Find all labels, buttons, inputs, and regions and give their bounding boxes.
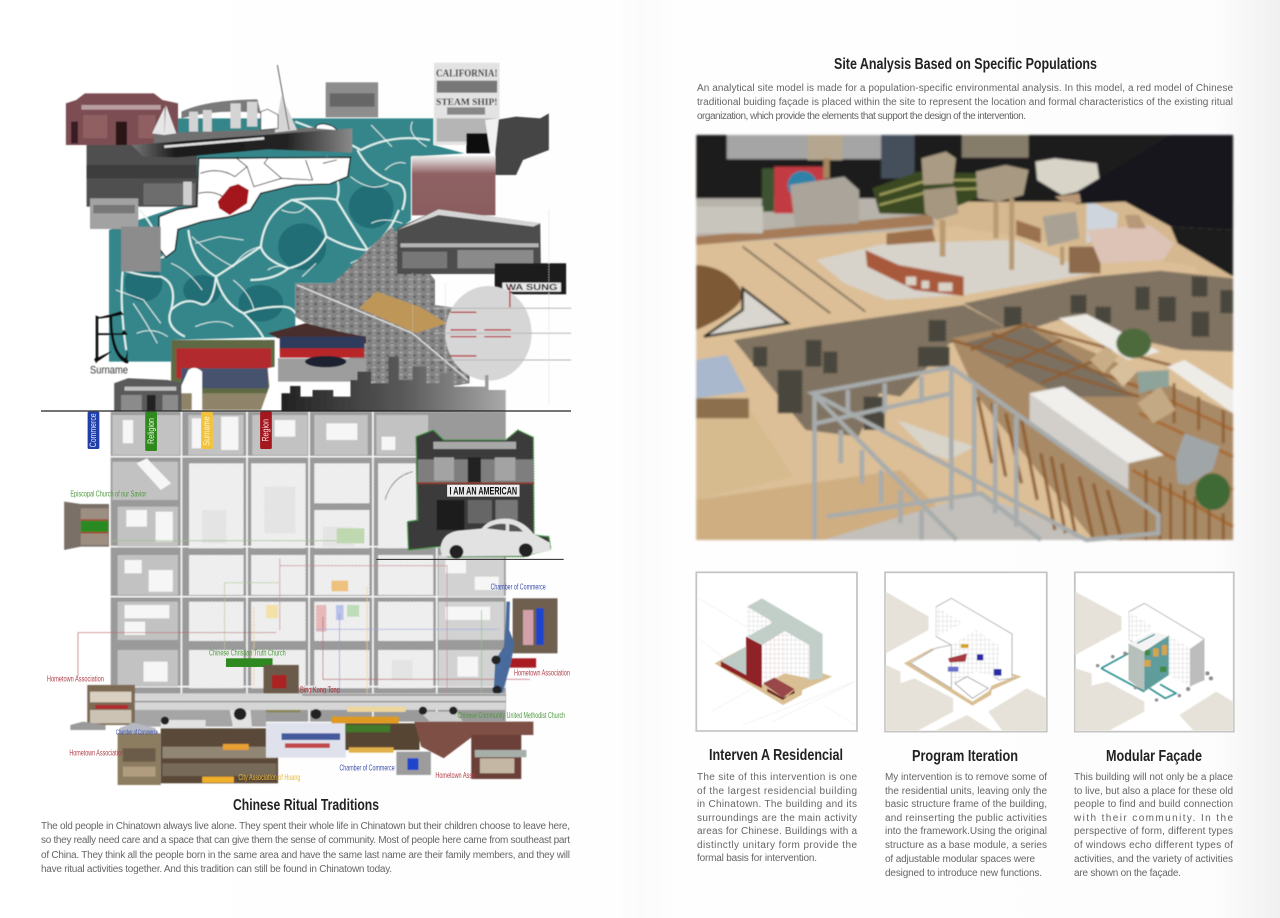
diagram: grey circle with red marks <box>413 210 571 403</box>
text block: column C <box>1073 772 1233 879</box>
label: Chamber of Commerce street: Chamber of Commerce <box>116 727 158 736</box>
person's arm <box>1074 135 1233 230</box>
tag: Religion: Religion <box>146 418 156 444</box>
label: Hometown Association lower left: Hometown Association <box>69 747 124 757</box>
text block: ritual traditions description: The old people in Chinatown always live alone. They spent their whole life in Chinatown but their children choose to leave here, <box>41 821 570 832</box>
frontage line <box>376 558 564 561</box>
poster: California steamship newspaper <box>434 63 500 145</box>
photo: small crowd <box>326 82 378 117</box>
heading: Chinese Ritual Traditions: Chinese Ritual Traditions <box>233 797 379 814</box>
panel: Chinese immigration collage <box>66 63 571 412</box>
inverted street band <box>135 693 506 710</box>
character: surname: 氏 <box>88 294 130 375</box>
text block: column C: people to find and build connection <box>1074 799 1233 810</box>
shop red <box>471 735 526 779</box>
shop left <box>87 685 135 725</box>
photo: steamship <box>131 65 352 157</box>
aerial base map <box>111 412 506 722</box>
label: Chamber of Commerce lower: Chamber of Commerce <box>339 762 395 772</box>
building: Episcopal Church <box>64 502 109 550</box>
photo: elderly man <box>121 227 161 272</box>
panel: Chinatown map <box>47 412 570 785</box>
tan site base <box>715 647 832 705</box>
map: Guangdong province <box>159 157 350 257</box>
upper right model pieces <box>1036 158 1233 277</box>
wooden truss structure <box>951 323 1233 540</box>
text block: column B: of adjustable modular spaces were <box>885 854 1035 865</box>
text block: site analysis description: An analytical site model is made for a population-specific environmental analysis. In this model, a red model of Chinese <box>697 83 1233 94</box>
green name bar <box>226 658 273 667</box>
text block: column A: The site of this intervention is one <box>697 772 857 783</box>
street collage of shops <box>70 685 533 785</box>
white building <box>936 598 1012 680</box>
text block: column C: to live, but also a place for these old <box>1074 786 1233 797</box>
sign: Wa Sung: WA SUNG <box>506 282 558 292</box>
text block: ritual traditions description: of China. They think all the people born in the same area and have the same last name are their family members, and they will <box>41 850 570 861</box>
text block: column B: designed to introduce new functions. <box>885 868 1042 879</box>
tag: Region <box>260 412 272 449</box>
photo: site model <box>696 135 1233 540</box>
red facade <box>746 637 762 688</box>
building: Chamber of Commerce roof <box>492 598 558 694</box>
colorful board <box>762 167 825 213</box>
program inserts <box>961 644 969 648</box>
sign: Wa Sung <box>495 263 566 294</box>
modular colored facade <box>1128 643 1144 692</box>
text block: column B: basic structure frame of the building, <box>885 799 1047 810</box>
lower base boards <box>696 227 1233 540</box>
label: Hometown Association right: Hometown Association <box>514 667 570 677</box>
shop tan <box>118 733 161 785</box>
building: Bing Kong Tong <box>259 665 302 712</box>
text block: column C: activities, and the variety of activities <box>1074 854 1233 865</box>
panel: axonometric B <box>885 572 1047 732</box>
text block: column A: of the largest residencial building <box>697 786 857 797</box>
small cube units and greenery <box>1090 328 1230 510</box>
curved plaza <box>743 220 1100 313</box>
text block: ritual traditions description: have ritual activities together. And this tradition can still be found in Chinatown today. <box>41 864 392 875</box>
text block: column B: structure as a base module, a series <box>885 840 1047 851</box>
label: Chamber of Commerce upper: Chamber of Commerce <box>491 581 546 591</box>
panel: axonometric A <box>696 572 857 731</box>
white road lines <box>111 412 506 722</box>
photo: I am an American storefront <box>407 430 551 557</box>
photo: red restaurant <box>268 323 366 382</box>
inverted sign <box>266 723 346 758</box>
text block: column A: distinctly unitary form provide the <box>697 840 857 851</box>
faint building shadows <box>202 487 413 680</box>
label: Chinese Community United Methodist Church: Chinese Community United Methodist Church <box>457 710 565 720</box>
text block: site analysis description: organization, which provide the elements that support the design of the intervention. <box>697 111 1026 122</box>
stacked terrain model <box>872 172 985 215</box>
highlighted red region <box>218 184 249 215</box>
photo: vintage car <box>440 519 551 558</box>
heading: Modular Façade: Modular Façade <box>1106 748 1202 765</box>
photo: community group in red <box>171 340 277 411</box>
panel: axonometric C <box>1075 572 1234 732</box>
photo: small temple <box>114 378 181 411</box>
background people and table <box>696 135 1233 243</box>
text block: column B: My intervention is to remove some of <box>885 772 1047 783</box>
text block: column A <box>697 772 857 864</box>
label: Bing Kong Tong: Bing Kong Tong <box>300 684 340 694</box>
tan base <box>904 648 1022 706</box>
grey steel frame <box>813 367 1158 540</box>
tag: Commerce <box>88 412 99 449</box>
label: Hometown Association bottom: Hometown Asso <box>435 770 475 780</box>
upper aerial blocks <box>112 415 428 687</box>
church brick <box>414 722 533 758</box>
poster: California steamship newspaper: STEAM SHIP! <box>436 98 497 108</box>
text block: site analysis description <box>697 83 1233 122</box>
white building <box>1129 603 1204 685</box>
photo: dark workers <box>466 113 549 175</box>
sign: I am an American <box>447 485 520 498</box>
label: Chinese Christian Truth Church: Chinese Christian Truth Church <box>209 648 286 658</box>
heading: Interven A Residencial: Interven A Residencial <box>709 747 843 764</box>
section divider line <box>41 410 571 412</box>
heading: Program Iteration: Program Iteration <box>912 748 1018 765</box>
text block: ritual traditions description: so they really need care and a space that can give them the sense of community. Most of people here came from southeast part <box>41 835 570 846</box>
water background <box>109 118 464 362</box>
heading: Site Analysis: Site Analysis Based on Specific Populations <box>834 56 1097 73</box>
tag: Commerce: Commerce <box>88 413 98 447</box>
label: City Association of Hoang: City Association of Hoang <box>238 772 301 782</box>
white roof units <box>1030 314 1233 490</box>
shop center <box>332 707 420 753</box>
text block: column C: with their community. In the <box>1073 813 1233 824</box>
colored highlight tiles <box>266 528 364 632</box>
text block: site analysis description: traditional buiding façade is placed within the site to represent the location and formal characteristics of the existing ritual <box>697 97 1233 108</box>
wooden beam <box>696 214 934 245</box>
text block: column C: of windows echo different types of <box>1074 840 1233 851</box>
text block: ritual traditions description <box>41 821 570 875</box>
photo: corner building <box>397 209 541 274</box>
label: Hometown Association left: Hometown Association <box>47 674 104 684</box>
context buildings <box>886 592 1046 731</box>
photo: interior hall <box>87 145 197 229</box>
aerial photo of Chinatown <box>295 227 470 397</box>
photo: red-tinted crowd <box>412 156 495 215</box>
text block: column C: This building will not only be a place <box>1074 772 1233 783</box>
photo: red temple <box>66 93 178 145</box>
tower units on stilts <box>922 152 1079 270</box>
chamber kiosk <box>396 752 431 775</box>
foil model <box>696 355 749 418</box>
text block: column C: are shown on the façade. <box>1074 868 1181 879</box>
connection lines <box>78 472 530 747</box>
hatched city blocks <box>189 463 433 688</box>
parked cars <box>70 707 463 733</box>
label: Surname: Surname <box>90 364 128 376</box>
text block: column A: areas for Chinese. Buildings with a <box>697 826 857 837</box>
text block: column B: into the framework.Using the original <box>885 826 1047 837</box>
tag: Region: Region <box>261 419 271 442</box>
text block: column B: the residential units, leaving only the <box>885 786 1047 797</box>
tag: Surname: Surname <box>202 416 212 446</box>
concrete buildings <box>696 135 859 233</box>
text block: column C: perspective of form, different types <box>1074 826 1233 837</box>
text block: column B: and reinserting the public activities <box>885 813 1047 824</box>
text block: column A: in Chinatown. The building and its <box>697 799 857 810</box>
teal base and trees <box>1101 653 1176 698</box>
text block: column A: formal basis for intervention. <box>697 853 817 864</box>
context buildings <box>1075 592 1233 731</box>
building volume <box>747 598 823 680</box>
faint context grid <box>699 598 855 725</box>
text block: column A: surroundings are the main activity <box>697 813 857 824</box>
mesh terrain <box>734 271 1233 437</box>
sign: I am an American: I AM AN AMERICAN <box>450 486 517 498</box>
poster: California steamship newspaper: CALIFORNIA! <box>436 68 497 80</box>
label: Episcopal Church: Episcopal Church of our Savior <box>70 489 146 499</box>
text block: column B <box>885 772 1047 879</box>
foreground tree-circle and frame <box>696 265 788 337</box>
shop brown <box>161 728 278 783</box>
red temple roof <box>763 678 795 698</box>
skyline <box>282 357 506 412</box>
